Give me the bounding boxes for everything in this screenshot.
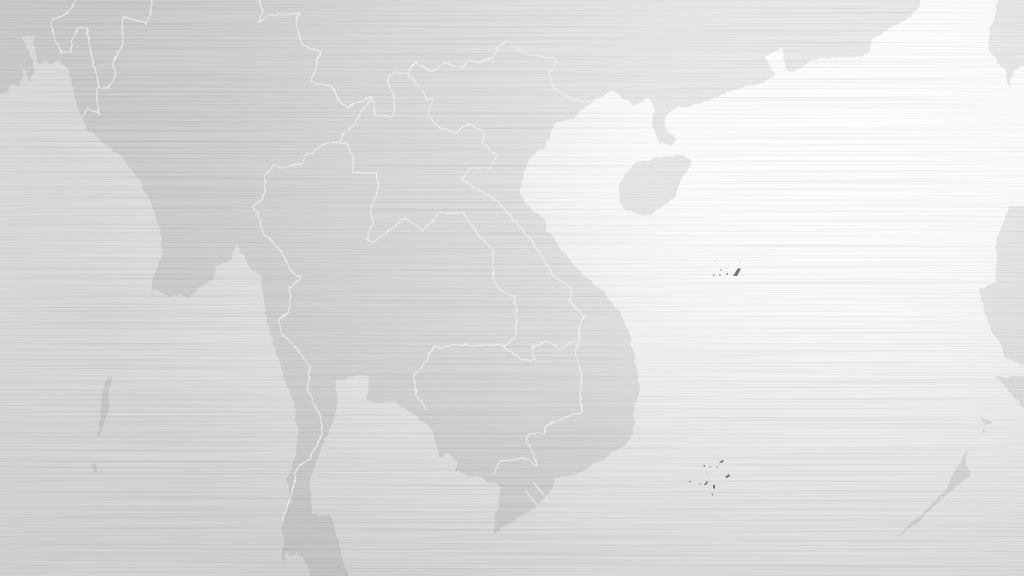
light coastal channels [525, 483, 544, 505]
thailand cambodia border [413, 345, 503, 411]
india bangladesh myanmar border [52, 0, 100, 117]
taiwan [989, 0, 1024, 88]
hainan [619, 155, 692, 216]
spratly islands [689, 460, 730, 496]
china myanmar laos vietnam border [257, 0, 592, 117]
cambodia vietnam border [493, 338, 582, 475]
inner peninsula islet [282, 545, 287, 560]
small philippine islands [982, 417, 993, 433]
country borders [52, 0, 592, 521]
laos cambodia border [503, 338, 580, 360]
myanmar laos border [340, 97, 372, 143]
thailand laos border [340, 143, 517, 347]
laos vietnam border [407, 73, 584, 338]
nicobar island [92, 462, 96, 472]
paracel islands [713, 261, 741, 276]
andaman islands [97, 375, 111, 437]
luzon [979, 203, 1024, 372]
india myanmar border [98, 0, 155, 88]
visayas [995, 376, 1024, 430]
thailand myanmar border [252, 142, 340, 521]
palawan [895, 448, 972, 541]
